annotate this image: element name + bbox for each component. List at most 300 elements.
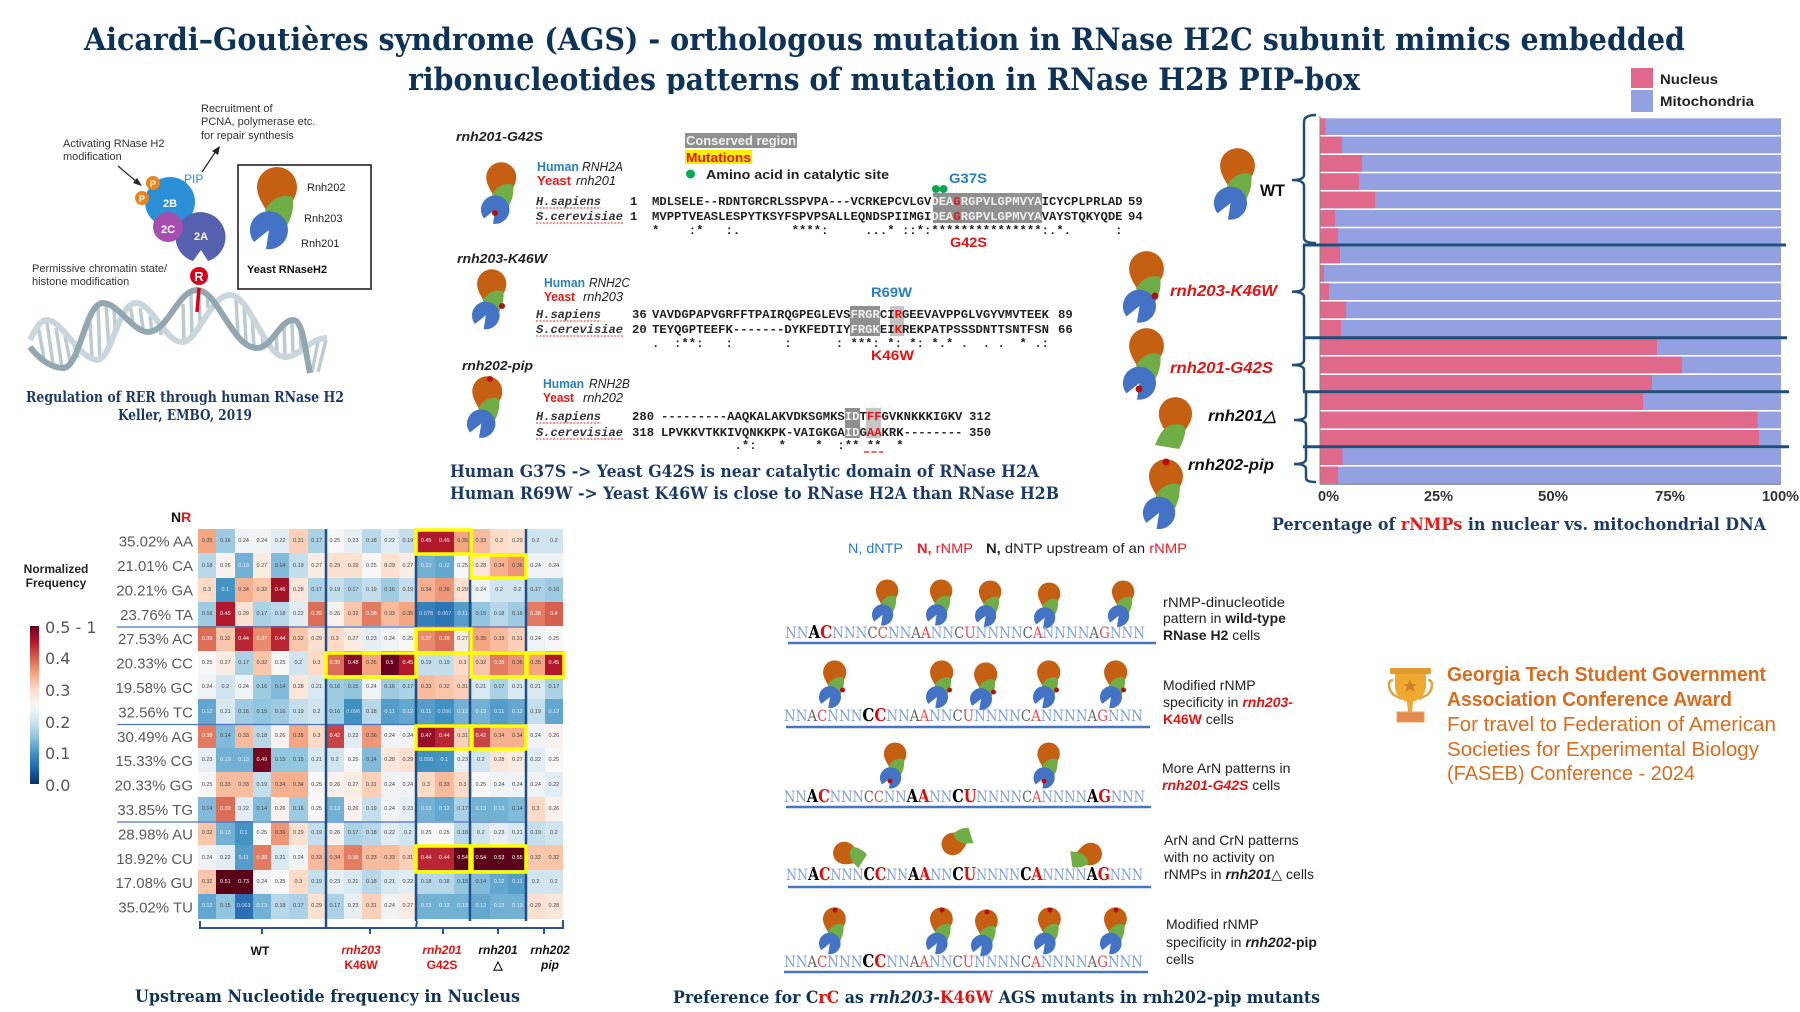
heatmap: upstream nucleotide frequency: 0.19 bbox=[421, 660, 431, 666]
heatmap: upstream nucleotide frequency: 0.29 bbox=[457, 587, 468, 593]
heatmap: upstream nucleotide frequency: 0.25 bbox=[549, 757, 559, 763]
heatmap: upstream nucleotide frequency: 0.19 bbox=[366, 806, 377, 812]
axis tick labels: 75% bbox=[1655, 489, 1685, 505]
heatmap: upstream nucleotide frequency: 0.2 bbox=[550, 830, 558, 836]
heatmap: upstream nucleotide frequency: 0.11 bbox=[384, 709, 395, 715]
heatmap: upstream nucleotide frequency: 0.45 bbox=[549, 660, 559, 666]
heatmap: upstream nucleotide frequency: 0.23 bbox=[366, 636, 377, 642]
heatmap: upstream nucleotide frequency: 0.28 bbox=[293, 587, 304, 593]
alignment: rnh203-K46W: VAVDGPAPVGRFFTPAIRQGPEGLEVSFRGRCIRGEEVAVPPGLVGYVMVTEEK bbox=[652, 308, 1050, 322]
heatmap: upstream nucleotide frequency: 0.39 bbox=[439, 636, 450, 642]
alignment legend: Amino acid in catalytic site bbox=[706, 167, 889, 182]
heatmap: upstream nucleotide frequency: 0.24 bbox=[530, 733, 541, 739]
panel: award bbox=[1389, 664, 1776, 785]
heatmap: upstream nucleotide frequency: 0.19 bbox=[257, 782, 267, 788]
heatmap: upstream nucleotide frequency: 0.28 bbox=[549, 903, 559, 909]
column labels: rnh202 bbox=[530, 943, 570, 957]
annotation: activating modification: Activating RNase H2 bbox=[63, 138, 164, 150]
group bracket bbox=[200, 920, 563, 934]
heatmap: upstream nucleotide frequency: 0.096 bbox=[437, 709, 451, 715]
heatmap: upstream nucleotide frequency: 0.2 bbox=[532, 879, 539, 885]
heatmap: upstream nucleotide frequency: 0.21 bbox=[220, 709, 231, 715]
alignment: rnh201-G42S: MDLSELE--RDNTGRCRLSSPVPA---VCRKEPCVLGVDEAGRGPVLGPMVYAICYCPLPRLAD bbox=[652, 195, 1123, 209]
alignment: rnh202-pip bbox=[462, 358, 991, 453]
alignment: rnh202-pip: .*: * * :** ** * bbox=[661, 439, 904, 453]
alignment: rnh201-G42S: Human bbox=[537, 159, 579, 174]
icon: human RNase H2 complex: P bbox=[139, 194, 145, 204]
heatmap: upstream nucleotide frequency: 0.21 bbox=[275, 855, 285, 861]
legend: nucleus and mitochondria: Nucleus bbox=[1660, 71, 1718, 87]
row: rnh203-K46W: NNACNNNCCNNAANNCUNNNNCANNNNAGNNN bbox=[784, 705, 1143, 726]
alignment: rnh201-G42S: 1 bbox=[630, 195, 637, 209]
heatmap: upstream nucleotide frequency: 0.14 bbox=[202, 806, 212, 812]
heatmap: upstream nucleotide frequency: 0.31 bbox=[457, 733, 468, 739]
alignment: rnh203-K46W: K46W bbox=[871, 347, 915, 363]
alignment: rnh201-G42S bbox=[456, 129, 1143, 250]
heatmap: upstream nucleotide frequency: 0.12 bbox=[494, 879, 504, 885]
heatmap: upstream nucleotide frequency: 0.23 bbox=[348, 538, 358, 544]
heatmap: upstream nucleotide frequency: 0.17 bbox=[549, 684, 559, 690]
heatmap: upstream nucleotide frequency: 0.12 bbox=[202, 903, 212, 909]
heatmap: upstream nucleotide frequency: 0.2 bbox=[222, 684, 229, 690]
heatmap: upstream nucleotide frequency: 0.17 bbox=[348, 830, 358, 836]
heatmap: upstream nucleotide frequency: 0.24 bbox=[202, 855, 212, 861]
heatmap: upstream nucleotide frequency: 0.18 bbox=[457, 830, 468, 836]
row labels: 35.02% AA bbox=[119, 534, 193, 551]
heatmap: upstream nucleotide frequency: 0.29 bbox=[348, 563, 358, 569]
heatmap: upstream nucleotide frequency: 0.16 bbox=[257, 684, 267, 690]
heatmap: upstream nucleotide frequency: 0.2 bbox=[295, 660, 302, 666]
heatmap: upstream nucleotide frequency: 0.25 bbox=[202, 660, 212, 666]
arrow: PIP to recruitment bbox=[202, 146, 220, 172]
column labels: K46W bbox=[344, 958, 378, 972]
heatmap: upstream nucleotide frequency: 0.32 bbox=[257, 660, 267, 666]
heatmap: upstream nucleotide frequency: 0.34 bbox=[494, 733, 504, 739]
row labels: 27.53% AC bbox=[118, 631, 193, 648]
heatmap: upstream nucleotide frequency: 0.4 bbox=[550, 611, 558, 617]
heatmap: upstream nucleotide frequency: 0.25 bbox=[366, 563, 377, 569]
caption: regulation of RER bbox=[26, 388, 344, 424]
heatmap: upstream nucleotide frequency: 0.15 bbox=[476, 611, 486, 617]
heatmap: upstream nucleotide frequency: 0.48 bbox=[348, 660, 358, 666]
heatmap: upstream nucleotide frequency: 0.29 bbox=[530, 903, 541, 909]
heatmap: upstream nucleotide frequency: 0.33 bbox=[220, 782, 231, 788]
heatmap: upstream nucleotide frequency: 0.28 bbox=[494, 757, 504, 763]
color scale: 0.5 - 1 bbox=[45, 618, 97, 637]
heatmap: upstream nucleotide frequency: 0.24 bbox=[476, 587, 486, 593]
summary text: human to yeast mapping: Human R69W -> Yeast K46W is close to RNase H2A than RNase H2B bbox=[450, 484, 1059, 504]
caption: regulation of RER: Keller, EMBO, 2019 bbox=[118, 406, 252, 424]
heatmap: upstream nucleotide frequency: 0.26 bbox=[220, 563, 231, 569]
heatmap: upstream nucleotide frequency: 0.35 bbox=[293, 733, 304, 739]
row: rnh201 delta: NNACNNNCCNNAANNCUNNNNCANNNNAGNNN bbox=[786, 864, 1143, 885]
heatmap: upstream nucleotide frequency: 0.17 bbox=[330, 903, 340, 909]
heatmap: upstream nucleotide frequency: 0.26 bbox=[330, 782, 340, 788]
heatmap: upstream nucleotide frequency: 0.39 bbox=[220, 806, 231, 812]
heatmap: upstream nucleotide frequency: 0.24 bbox=[494, 782, 504, 788]
heatmap: upstream nucleotide frequency: 0.32 bbox=[348, 611, 358, 617]
heatmap: upstream nucleotide frequency: 0.19 bbox=[330, 587, 340, 593]
box: yeast RNaseH2 legend: Yeast RNaseH2 bbox=[247, 264, 327, 276]
heatmap: upstream nucleotide frequency: 0.28 bbox=[384, 757, 395, 763]
heatmap: upstream nucleotide frequency: 0.29 bbox=[311, 636, 322, 642]
heatmap: upstream nucleotide frequency: 0.36 bbox=[439, 587, 450, 593]
heatmap: upstream nucleotide frequency: 0.26 bbox=[330, 611, 340, 617]
heatmap: upstream nucleotide frequency: 0.32 bbox=[530, 855, 541, 861]
highlight boxes bbox=[326, 530, 564, 872]
heatmap: upstream nucleotide frequency: 0.34 bbox=[494, 563, 504, 569]
heatmap: upstream nucleotide frequency: 0.14 bbox=[275, 684, 285, 690]
heatmap: upstream nucleotide frequency: 0.25 bbox=[421, 830, 431, 836]
alignment: rnh201-G42S: 59 bbox=[1128, 195, 1143, 209]
heatmap: upstream nucleotide frequency: 0.29 bbox=[330, 563, 340, 569]
heatmap: upstream nucleotide frequency: 0.44 bbox=[439, 855, 450, 861]
row: rnh202-pip: specificity in rnh202-pip bbox=[1166, 934, 1317, 950]
color scale: 0.2 bbox=[45, 713, 70, 732]
heatmap: upstream nucleotide frequency: 0.3 bbox=[313, 733, 320, 739]
key: nucleotide notation bbox=[848, 540, 1187, 556]
heatmap: upstream nucleotide frequency: 0.21 bbox=[512, 830, 523, 836]
strain: rnh201 delta: rnh201△ bbox=[1208, 408, 1277, 425]
heatmap: upstream nucleotide frequency: 0.13 bbox=[494, 806, 504, 812]
heatmap: upstream nucleotide frequency: 0.24 bbox=[202, 684, 212, 690]
heatmap: upstream nucleotide frequency: 0.33 bbox=[494, 636, 504, 642]
annotation: recruitment: Recruitment of bbox=[201, 103, 273, 115]
alignment: rnh201-G42S: G42S bbox=[950, 234, 987, 250]
key: nucleotide notation: N, rNMP bbox=[917, 540, 973, 556]
strain: rnh202-pip: rnh202-pip bbox=[1188, 457, 1274, 474]
heatmap: upstream nucleotide frequency: 0.067 bbox=[437, 611, 451, 617]
caption: upstream nucleotide frequency: Upstream Nucleotide frequency in Nucleus bbox=[135, 987, 520, 1007]
heatmap: upstream nucleotide frequency: 0.31 bbox=[457, 684, 468, 690]
row labels: 19.58% GC bbox=[115, 680, 193, 697]
heatmap: upstream nucleotide frequency: 0.16 bbox=[330, 684, 340, 690]
alignment: rnh203-K46W: S.cerevisiae bbox=[536, 323, 623, 337]
heatmap: upstream nucleotide frequency: 0.18 bbox=[275, 903, 285, 909]
color scale title: Normalized bbox=[24, 562, 88, 576]
alignment: rnh202-pip: RNH2B bbox=[589, 376, 630, 391]
alignment: rnh201-G42S: MVPPTVEASLESPYTKSYFSPVPSALLEQNDSPIIMGIDEAGRGPVLGPMVYAVAYSTQKYQDE bbox=[652, 210, 1123, 224]
heatmap: upstream nucleotide frequency: 0.25 bbox=[330, 538, 340, 544]
heatmap: upstream nucleotide frequency: 0.18 bbox=[494, 611, 504, 617]
heatmap: upstream nucleotide frequency: 0.31 bbox=[403, 855, 413, 861]
heatmap: upstream nucleotide frequency: 0.32 bbox=[549, 855, 559, 861]
heatmap: upstream nucleotide frequency: 0.14 bbox=[366, 757, 377, 763]
heatmap: upstream nucleotide frequency: 0.44 bbox=[275, 636, 285, 642]
row labels: 20.21% GA bbox=[116, 582, 193, 600]
heatmap: upstream nucleotide frequency: 0.19 bbox=[403, 587, 413, 593]
heatmap: upstream nucleotide frequency: 0.18 bbox=[275, 611, 285, 617]
axis tick labels: 25% bbox=[1424, 489, 1453, 505]
heatmap: upstream nucleotide frequency: 0.33 bbox=[311, 855, 322, 861]
award text: (FASEB) Conference - 2024 bbox=[1447, 763, 1695, 785]
heatmap: upstream nucleotide frequency: 0.15 bbox=[275, 757, 285, 763]
heatmap: upstream nucleotide frequency: 0.33 bbox=[366, 855, 377, 861]
heatmap: upstream nucleotide frequency: 0.063 bbox=[237, 903, 250, 909]
heatmap: upstream nucleotide frequency: 0.32 bbox=[202, 830, 212, 836]
alignment: rnh202-pip: 280 bbox=[632, 410, 654, 424]
heatmap: upstream nucleotide frequency: 0.33 bbox=[476, 538, 486, 544]
alignment: rnh203-K46W: . :**: : : : ***: *: *: *.* . . . * .: bbox=[652, 337, 1049, 351]
heatmap: upstream nucleotide frequency: 0.12 bbox=[439, 563, 450, 569]
column labels bbox=[251, 943, 570, 972]
heatmap: upstream nucleotide frequency: 0.28 bbox=[293, 684, 304, 690]
box: yeast RNaseH2 legend: Rnh203 bbox=[304, 213, 343, 225]
heatmap: upstream nucleotide frequency: 0.3 bbox=[459, 782, 466, 788]
box: yeast RNaseH2 legend: Rnh201 bbox=[301, 238, 340, 250]
heatmap: upstream nucleotide frequency: 0.3 bbox=[203, 587, 211, 593]
heatmap: upstream nucleotide frequency: 0.24 bbox=[530, 782, 541, 788]
heatmap: upstream nucleotide frequency: 0.16 bbox=[384, 587, 395, 593]
heatmap: upstream nucleotide frequency: 0.39 bbox=[311, 611, 322, 617]
heatmap: upstream nucleotide frequency: 0.3 bbox=[495, 538, 503, 544]
heatmap: upstream nucleotide frequency: 0.3 bbox=[459, 660, 466, 666]
heatmap: upstream nucleotide frequency: 0.51 bbox=[220, 879, 231, 885]
heatmap: upstream nucleotide frequency: 0.33 bbox=[421, 684, 431, 690]
heatmap: upstream nucleotide frequency: 0.17 bbox=[457, 806, 468, 812]
title: Aicardi–Goutières syndrome (AGS) - orthologous mutation in RNase H2C subunit mimics embedded bbox=[83, 22, 1685, 58]
row labels: 35.02% TU bbox=[118, 900, 193, 917]
icon: human RNase H2 complex: PIP bbox=[184, 172, 203, 186]
alignment: rnh203-K46W: Human bbox=[544, 275, 585, 290]
heatmap: upstream nucleotide frequency: 0.2 bbox=[331, 757, 339, 763]
axis tick labels: 0% bbox=[1318, 489, 1339, 505]
heatmap: upstream nucleotide frequency: 0.34 bbox=[421, 587, 431, 593]
heatmap: upstream nucleotide frequency: 0.38 bbox=[202, 733, 212, 739]
heatmap: upstream nucleotide frequency: 0.27 bbox=[403, 903, 413, 909]
heatmap: upstream nucleotide frequency: 0.36 bbox=[512, 563, 523, 569]
heatmap: upstream nucleotide frequency: 0.24 bbox=[293, 855, 304, 861]
row: wild-type bbox=[785, 579, 1286, 643]
heatmap: upstream nucleotide frequency: 0.31 bbox=[366, 903, 377, 909]
heatmap: upstream nucleotide frequency: 0.19 bbox=[439, 660, 450, 666]
axis tick labels: 100% bbox=[1762, 489, 1799, 505]
alignment: rnh203-K46W: RNH2C bbox=[589, 275, 631, 290]
heatmap: upstream nucleotide frequency: 0.19 bbox=[311, 830, 322, 836]
heatmap: upstream nucleotide frequency: 0.13 bbox=[494, 903, 504, 909]
heatmap: upstream nucleotide frequency: 0.22 bbox=[220, 855, 231, 861]
alignment: rnh201-G42S: * :* :. ****: ...* ::*:***************:.*. : bbox=[652, 224, 1122, 238]
award text bbox=[1447, 664, 1776, 785]
heatmap: upstream nucleotide frequency: 0.25 bbox=[202, 782, 212, 788]
row: rnh201 delta bbox=[786, 823, 1314, 887]
heatmap: upstream nucleotide frequency: 0.25 bbox=[275, 660, 285, 666]
heatmap: upstream nucleotide frequency: 0.24 bbox=[530, 636, 541, 642]
heatmap: upstream nucleotide frequency: 0.12 bbox=[202, 709, 212, 715]
heatmap: upstream nucleotide frequency: 0.37 bbox=[421, 636, 431, 642]
color scale: 0.1 bbox=[45, 744, 70, 763]
heatmap: upstream nucleotide frequency: 0.24 bbox=[530, 563, 541, 569]
heatmap: upstream nucleotide frequency: 0.2 bbox=[514, 587, 521, 593]
heatmap: upstream nucleotide frequency: 0.15 bbox=[293, 757, 304, 763]
heatmap: upstream nucleotide frequency: 0.098 bbox=[419, 757, 433, 763]
panel: human RNase H2 regulation diagram bbox=[26, 103, 371, 424]
heatmap: upstream nucleotide frequency: 0.31 bbox=[366, 782, 377, 788]
heatmap: upstream nucleotide frequency: 0.32 bbox=[202, 879, 212, 885]
row group lines bbox=[117, 627, 526, 822]
heatmap: upstream nucleotide frequency: 0.38 bbox=[494, 660, 504, 666]
heatmap: upstream nucleotide frequency: 0.36 bbox=[275, 830, 285, 836]
heatmap: upstream nucleotide frequency: 0.3 bbox=[295, 879, 302, 885]
heatmap: upstream nucleotide frequency: 0.22 bbox=[293, 611, 304, 617]
row labels: 28.98% AU bbox=[118, 826, 193, 844]
heatmap: upstream nucleotide frequency: 0.17 bbox=[311, 538, 322, 544]
award text: For travel to Federation of American bbox=[1447, 714, 1776, 736]
alignment: rnh202-pip: Yeast bbox=[543, 390, 575, 405]
heatmap: upstream nucleotide frequency: 0.38 bbox=[530, 611, 541, 617]
heatmap: upstream nucleotide frequency: 0.35 bbox=[476, 636, 486, 642]
heatmap: upstream nucleotide frequency: 0.19 bbox=[293, 563, 304, 569]
heatmap: upstream nucleotide frequency: 0.24 bbox=[238, 684, 249, 690]
heatmap: upstream nucleotide frequency: 0.33 bbox=[384, 855, 395, 861]
heatmap: upstream nucleotide frequency: 0.11 bbox=[457, 611, 468, 617]
heatmap: upstream nucleotide frequency: 0.27 bbox=[348, 782, 358, 788]
heatmap: upstream nucleotide frequency: 0.54 bbox=[476, 855, 486, 861]
row: rnh202-pip: Modified rNMP bbox=[1166, 916, 1259, 932]
heatmap: upstream nucleotide frequency: 0.11 bbox=[421, 709, 431, 715]
heatmap: upstream nucleotide frequency: 0.22 bbox=[549, 782, 559, 788]
heatmap: upstream nucleotide frequency: 0.23 bbox=[457, 757, 468, 763]
heatmap: upstream nucleotide frequency: 0.21 bbox=[348, 879, 358, 885]
heatmap: upstream nucleotide frequency: 0.17 bbox=[348, 587, 358, 593]
alignment: rnh203-K46W: rnh203-K46W bbox=[457, 251, 549, 266]
alignment: rnh202-pip: S.cerevisiae bbox=[536, 426, 623, 440]
heatmap: upstream nucleotide frequency: 0.22 bbox=[384, 538, 395, 544]
row: wild-type: pattern in wild-type bbox=[1163, 610, 1286, 626]
heatmap: upstream nucleotide frequency: 0.13 bbox=[421, 563, 431, 569]
alignment: rnh201-G42S: RNH2A bbox=[582, 159, 623, 174]
panel: percentage of rNMPs chart bbox=[1123, 68, 1799, 535]
heatmap: upstream nucleotide frequency: 0.17 bbox=[311, 587, 322, 593]
row: rnh202-pip: cells bbox=[1166, 951, 1194, 967]
column labels: WT bbox=[251, 944, 270, 958]
row labels: 23.76% TA bbox=[120, 607, 193, 624]
alignment legend: Mutations bbox=[686, 150, 751, 165]
group brackets bbox=[1292, 115, 1316, 482]
color scale: 0.0 bbox=[45, 776, 70, 795]
heatmap: upstream nucleotide frequency: 0.13 bbox=[220, 757, 231, 763]
alignment: rnh201-G42S: G37S bbox=[949, 170, 987, 186]
row: rnh202-pip: NNACNNNCCNNAANNCUNNNNCANNNNAGNNN bbox=[784, 951, 1143, 972]
heatmap: upstream nucleotide frequency: 0.46 bbox=[275, 587, 285, 593]
heatmap: upstream nucleotide frequency: 0.11 bbox=[512, 879, 523, 885]
heatmap: upstream nucleotide frequency: 0.14 bbox=[512, 806, 523, 812]
icon: human RNase H2 complex: 2C bbox=[161, 224, 175, 236]
heatmap: upstream nucleotide frequency: 0.3 bbox=[532, 806, 539, 812]
row: rnh202-pip bbox=[784, 907, 1317, 972]
alignment: rnh202-pip: H.sapiens bbox=[536, 410, 601, 424]
summary text: human to yeast mapping: Human G37S -> Yeast G42S is near catalytic domain of RNase H2A bbox=[450, 462, 1040, 482]
heatmap: upstream nucleotide frequency: 0.3 bbox=[331, 636, 339, 642]
heatmap: upstream nucleotide frequency: 0.32 bbox=[257, 587, 267, 593]
heatmap: upstream nucleotide frequency: 0.27 bbox=[348, 636, 358, 642]
heatmap: upstream nucleotide frequency: 0.34 bbox=[238, 587, 249, 593]
heatmap: upstream nucleotide frequency: 0.16 bbox=[384, 684, 395, 690]
heatmap: upstream nucleotide frequency: 0.22 bbox=[530, 757, 541, 763]
heatmap: upstream nucleotide frequency: 0.27 bbox=[257, 563, 267, 569]
alignment: rnh203-K46W: TEYQGPTEEFK-------DYKFEDTIYFRGKEIKREKPATPSSSDNTTSNTFSN bbox=[652, 323, 1049, 337]
row: rnh203-K46W: K46W cells bbox=[1163, 711, 1234, 727]
heatmap: upstream nucleotide frequency: 0.17 bbox=[293, 903, 304, 909]
heatmap: upstream nucleotide frequency: 0.21 bbox=[311, 757, 322, 763]
heatmap: upstream nucleotide frequency: 0.25 bbox=[549, 636, 559, 642]
icon: human RNase H2 complex: 2A bbox=[194, 231, 208, 243]
icon: human RNase H2 complex bbox=[135, 172, 226, 261]
stacked bar chart bbox=[1320, 116, 1781, 484]
row: rnh203-K46W: Modified rNMP bbox=[1163, 677, 1256, 693]
heatmap: upstream nucleotide frequency: 0.45 bbox=[439, 538, 450, 544]
heatmap: upstream nucleotide frequency: 0.15 bbox=[220, 903, 231, 909]
heatmap: upstream nucleotide frequency: 0.21 bbox=[512, 684, 523, 690]
title: ribonucleotides patterns of mutation in RNase H2B PIP-box bbox=[408, 62, 1360, 98]
heatmap: upstream nucleotide frequency: 0.27 bbox=[220, 660, 231, 666]
heatmap: upstream nucleotide frequency: 0.38 bbox=[257, 855, 267, 861]
heatmap: upstream nucleotide frequency: 0.17 bbox=[494, 684, 504, 690]
heatmap: upstream nucleotide frequency: 0.17 bbox=[238, 660, 249, 666]
heatmap: upstream nucleotide frequency: 0.12 bbox=[403, 709, 413, 715]
heatmap: upstream nucleotide frequency: 0.19 bbox=[366, 587, 377, 593]
heatmap: upstream nucleotide frequency: 0.18 bbox=[366, 830, 377, 836]
header: NR: NR bbox=[171, 509, 191, 525]
caption: percentage of rNMPs: Percentage of rNMPs in nuclear vs. mitochondrial DNA bbox=[1272, 515, 1767, 535]
heatmap: upstream nucleotide frequency: 0.39 bbox=[202, 636, 212, 642]
heatmap: upstream nucleotide frequency: 0.16 bbox=[238, 709, 249, 715]
heatmap: upstream nucleotide frequency: 0.33 bbox=[439, 782, 450, 788]
alignment: rnh203-K46W: rnh203 bbox=[583, 289, 624, 304]
strain: rnh203-K46W bbox=[1123, 251, 1279, 323]
alignment: rnh202-pip: Human bbox=[543, 376, 584, 391]
heatmap: upstream nucleotide frequency: 0.34 bbox=[293, 782, 304, 788]
column group lines bbox=[326, 529, 526, 928]
column labels: rnh201 bbox=[422, 943, 462, 957]
row labels: 17.08% GU bbox=[115, 875, 193, 892]
legend: nucleus and mitochondria bbox=[1631, 68, 1754, 112]
heatmap: upstream nucleotide frequency: 0.14 bbox=[275, 563, 285, 569]
heatmap: upstream nucleotide frequency: 0.14 bbox=[476, 879, 486, 885]
heatmap: upstream nucleotide frequency: 0.27 bbox=[457, 636, 468, 642]
heatmap: upstream nucleotide frequency: 0.33 bbox=[238, 733, 249, 739]
heatmap: upstream nucleotide frequency: 0.18 bbox=[257, 733, 267, 739]
heatmap: upstream nucleotide frequency: 0.34 bbox=[330, 855, 340, 861]
alignment: rnh202-pip: ---------AAQKALAKVDKSGMKSIDTFFGVKNKKKIGKV bbox=[661, 410, 963, 424]
heatmap: upstream nucleotide frequency: 0.24 bbox=[384, 782, 395, 788]
alignment: rnh203-K46W: 36 bbox=[632, 308, 647, 322]
column labels: rnh203 bbox=[341, 943, 381, 957]
row: rnh201 delta: ArN and CrN patterns bbox=[1164, 832, 1299, 848]
heatmap: upstream nucleotide frequency: 0.2 bbox=[495, 587, 503, 593]
heatmap: upstream nucleotide frequency: 0.31 bbox=[293, 538, 304, 544]
row: rnh201-G42S bbox=[784, 742, 1290, 807]
heatmap: upstream nucleotide frequency: 0.34 bbox=[275, 782, 285, 788]
icon: trophy bbox=[1389, 668, 1432, 722]
heatmap: upstream nucleotide frequency: 0.35 bbox=[202, 538, 212, 544]
heatmap: upstream nucleotide frequency: 0.13 bbox=[421, 806, 431, 812]
heatmap: upstream nucleotide frequency: 0.2 bbox=[404, 830, 412, 836]
row labels: 30.49% AG bbox=[117, 729, 193, 746]
color scale bbox=[30, 618, 97, 795]
heatmap: upstream nucleotide frequency: 0.18 bbox=[439, 879, 450, 885]
heatmap: upstream nucleotide frequency: 0.29 bbox=[311, 903, 322, 909]
heatmap: upstream nucleotide frequency: 0.3 bbox=[422, 782, 430, 788]
annotation: chromatin state: histone modification bbox=[32, 276, 129, 288]
heatmap: upstream nucleotide frequency: 0.11 bbox=[494, 709, 504, 715]
heatmap: upstream nucleotide frequency: 0.13 bbox=[238, 563, 249, 569]
heatmap: upstream nucleotide frequency: 0.23 bbox=[202, 757, 212, 763]
icon: human RNase H2 complex: 2B bbox=[163, 198, 177, 210]
heatmap: upstream nucleotide frequency: 0.16 bbox=[549, 587, 559, 593]
row: rnh201 delta: rNMPs in rnh201△ cells bbox=[1164, 866, 1314, 882]
DNA helix bbox=[30, 290, 327, 373]
